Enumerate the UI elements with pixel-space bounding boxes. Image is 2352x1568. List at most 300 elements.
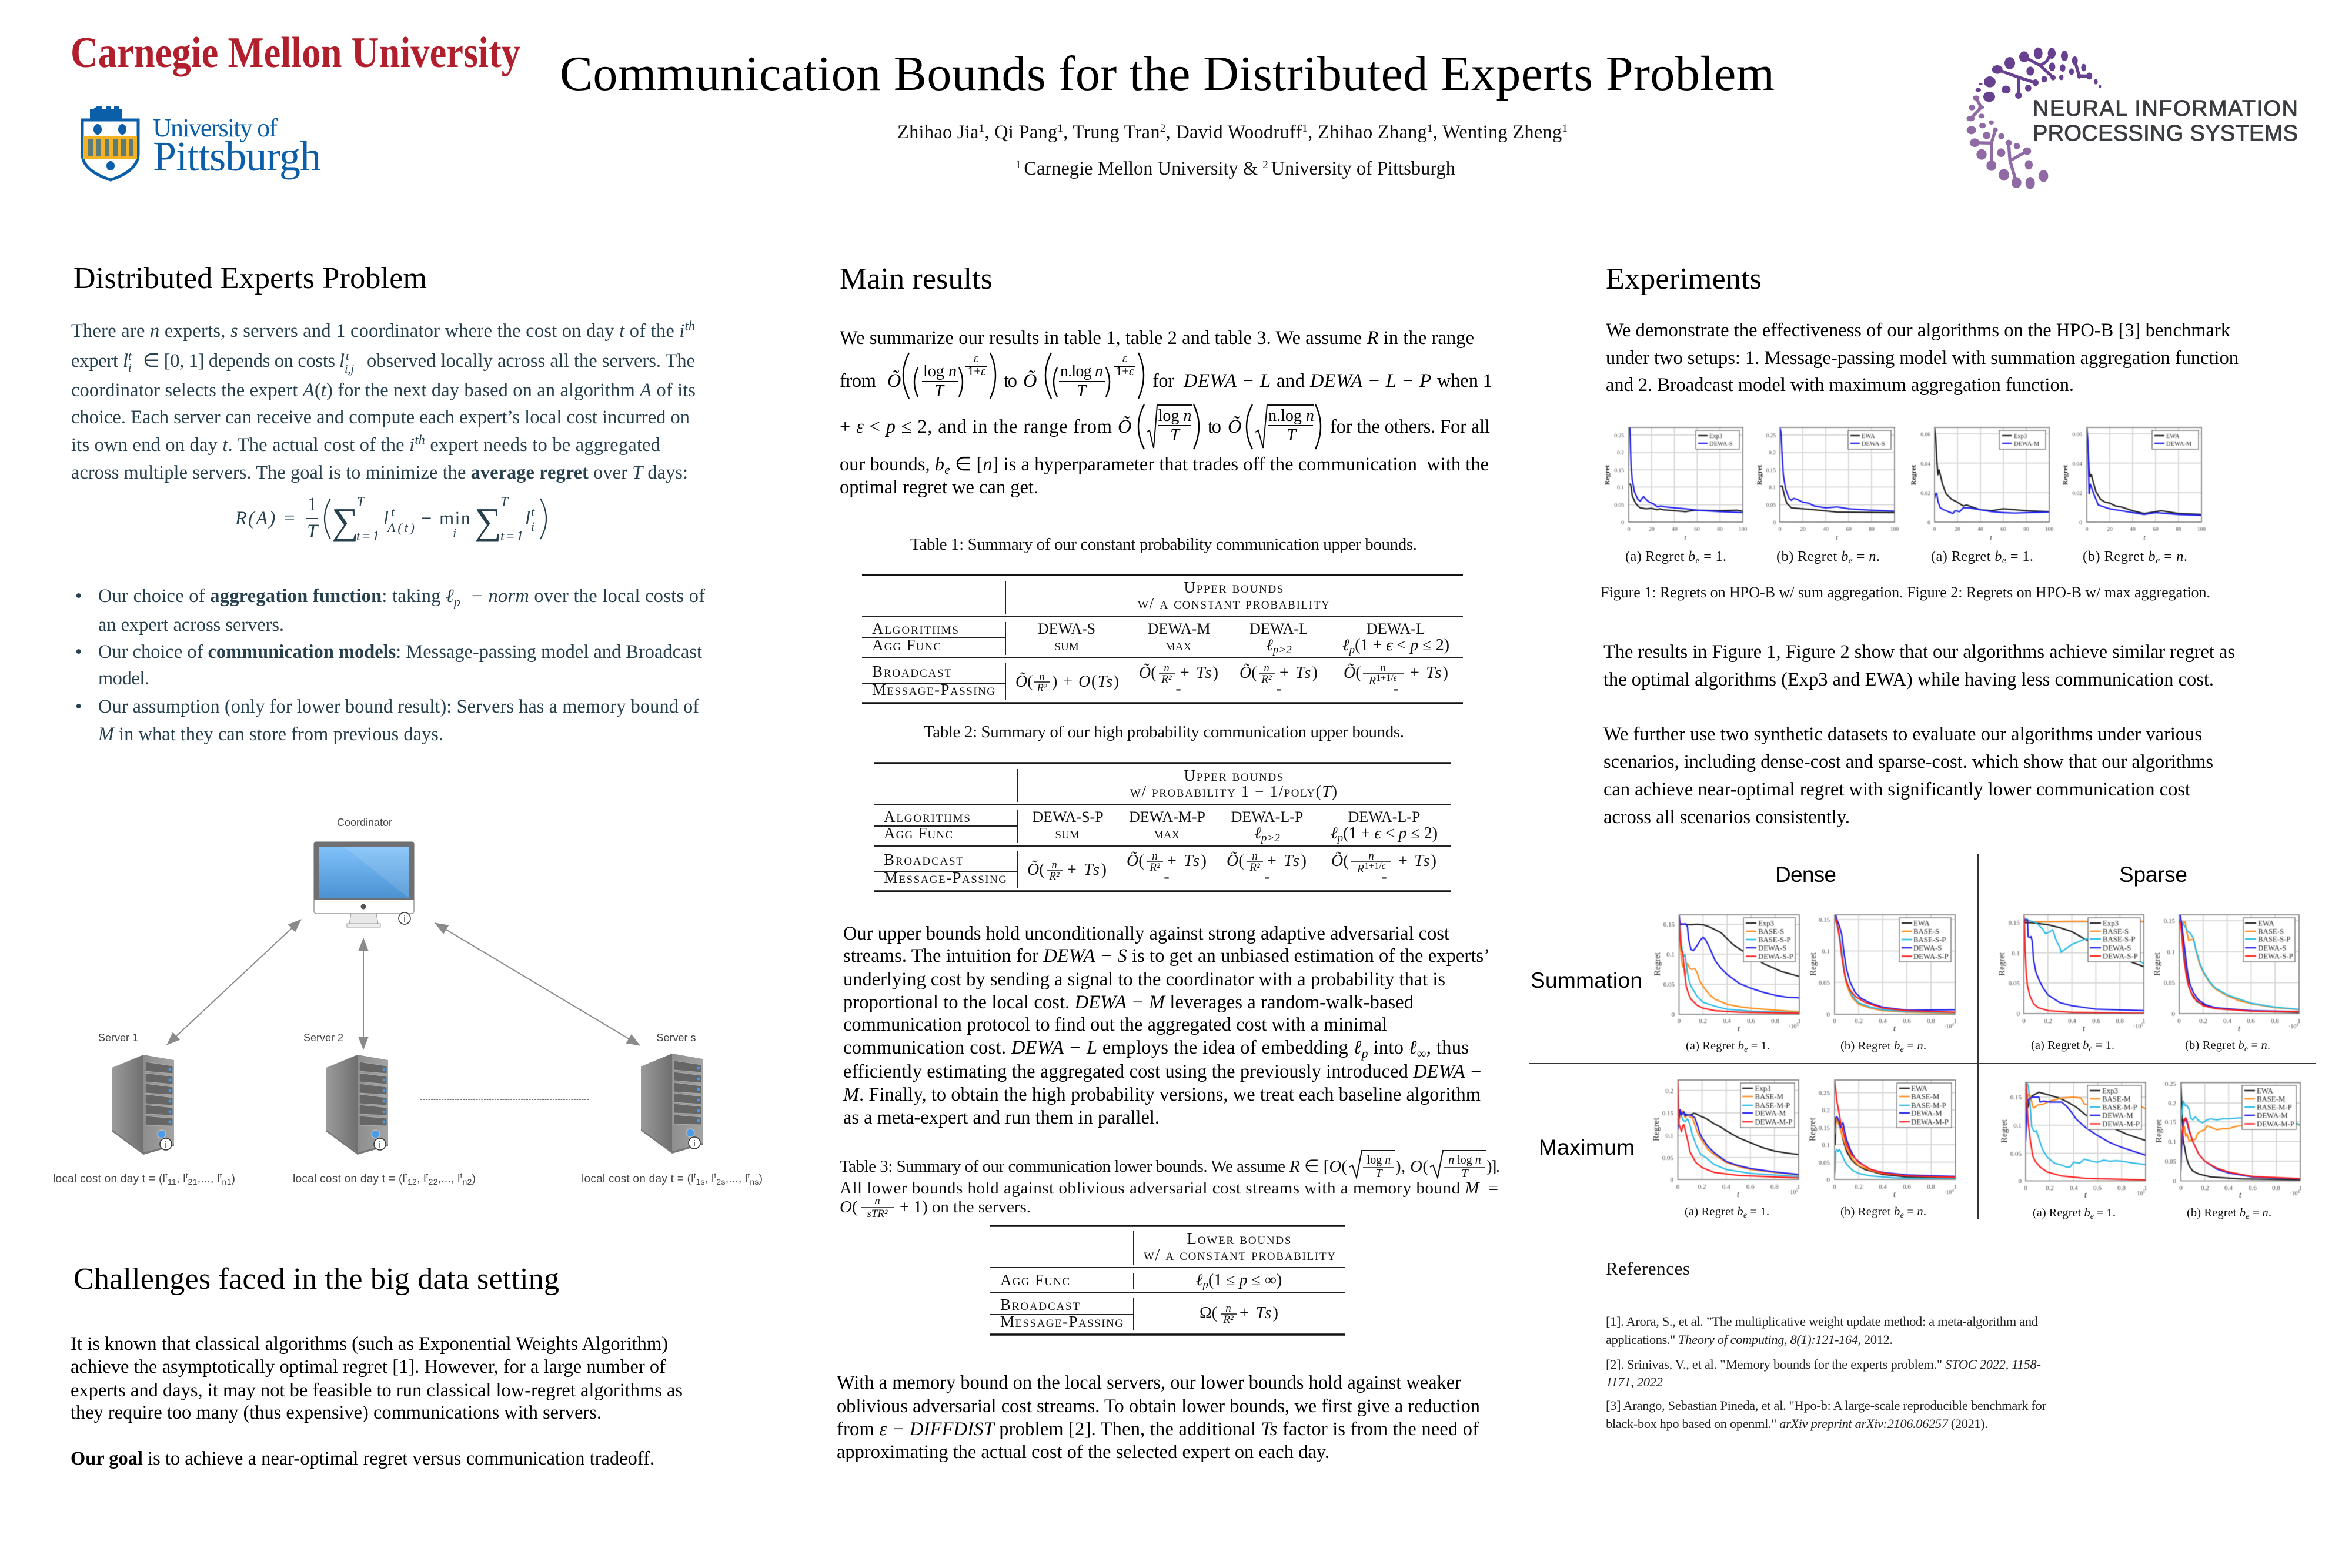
text block: bullet list: • xyxy=(75,696,82,717)
text block: problem description: ∈ [0, 1] depends on costs xyxy=(143,350,335,372)
table 1: constant probability upper bounds: + Ts) xyxy=(1180,664,1218,682)
chart: dense summation a: 0 xyxy=(1671,1011,1675,1018)
table 1: constant probability upper bounds: ) + O(Ts) xyxy=(1052,673,1119,691)
chart: sparse maximum b: t xyxy=(2239,1191,2242,1200)
table 2: high probability upper bounds: Broadcast xyxy=(884,851,963,868)
chart: dense summation b: 0 xyxy=(1826,1011,1830,1018)
chart: dense summation b: ·10 xyxy=(1944,1024,1952,1030)
icon: server 2 xyxy=(326,1055,388,1155)
chart: sparse summation a: 0.1 xyxy=(2012,950,2020,957)
table 3: lower bounds xyxy=(990,1226,1345,1335)
chart: dense summation b: 0.6 xyxy=(1903,1018,1911,1025)
sub-captions: synthetic plots: e xyxy=(1743,1211,1747,1220)
panel: main results xyxy=(837,262,1500,1463)
sub-captions: HPO-B plots: = 1. xyxy=(2006,549,2033,564)
text block: problem description: its own end on day t. The actual cost of the i xyxy=(71,434,415,456)
table 2: high probability upper bounds: Õ( xyxy=(1127,852,1144,870)
table 2: high probability upper bounds: DEWA-S-P xyxy=(1032,808,1104,825)
text block: upper bound intuition: as a meta-expert and run them in parallel. xyxy=(843,1107,1160,1128)
text block: results summary: 1+ε xyxy=(1116,364,1134,378)
text block: upper bound intuition: p xyxy=(1360,1046,1368,1061)
chart: dense summation b: 4 xyxy=(1952,1022,1954,1027)
sub-captions: synthetic plots xyxy=(1685,1039,2271,1221)
table 2: high probability upper bounds: + Ts) xyxy=(1267,852,1307,870)
chart: sparse summation b: 1 xyxy=(2297,1018,2301,1025)
chart: dense maximum a: 1 xyxy=(1797,1183,1800,1191)
authors: , Qi Pang xyxy=(984,122,1057,143)
table 2: high probability upper bounds: 1+1/ xyxy=(1364,861,1382,871)
text block: results summary: when 1 xyxy=(1437,370,1492,392)
caption: table 3: T xyxy=(1375,1167,1383,1180)
text block: problem description xyxy=(71,318,696,483)
chart: sparse summation b: EWA xyxy=(2258,920,2274,928)
chart: figure 1b regret sum aggregation: 40 xyxy=(1823,527,1829,533)
sub-captions: HPO-B plots: (a) Regret b xyxy=(1931,549,2002,564)
table 2: high probability upper bounds: ℓ xyxy=(1331,824,1338,842)
wordmark: University of: University of xyxy=(153,113,278,142)
formula: average regret: − xyxy=(421,508,432,529)
chart: dense summation a: ·10 xyxy=(1789,1024,1796,1030)
sub-captions: synthetic plots: e xyxy=(2246,1212,2249,1221)
text block: synthetic datasets: scenarios, including dense-cost and sparse-cost. which show that our algorithms xyxy=(1603,751,2213,773)
text block: lower bound intuition: from ε − DIFFDIST problem [2]. Then, the additional Ts factor is from the need of xyxy=(837,1419,1479,1440)
text block: upper bound intuition: into xyxy=(1368,1037,1408,1058)
text block: problem description: choice. Each server can receive and compute each expert’s local cost incurred on xyxy=(71,407,690,428)
text block: problem description: t xyxy=(128,350,132,363)
chart: dense maximum b: 0.2 xyxy=(1855,1183,1863,1191)
table 1: constant probability upper bounds: Õ( xyxy=(1240,664,1257,682)
table 1: constant probability upper bounds: sum xyxy=(1054,636,1079,654)
authors: Zhihao Jia xyxy=(897,122,978,143)
chart: figure 1b regret sum aggregation: 0 xyxy=(1773,520,1776,526)
text block: results summary: Õ xyxy=(1228,416,1241,437)
formula: average regret: R(A) = xyxy=(235,508,296,529)
authors: 1 xyxy=(1427,122,1433,135)
chart: sparse maximum a: 1 xyxy=(2144,1185,2147,1192)
text block: results discussion: the optimal algorithms (Exp3 and EWA) while having less communication cost. xyxy=(1603,669,2214,690)
chart: sparse maximum b: 0 xyxy=(2173,1178,2177,1185)
caption: table 3: O( xyxy=(840,1198,858,1216)
chart: sparse maximum b: BASE-M xyxy=(2257,1095,2285,1103)
chart: dense maximum a: 0 xyxy=(1676,1183,1680,1191)
label: local cost server 2: t xyxy=(405,1171,407,1180)
text block: HPO-B intro xyxy=(1606,320,2239,396)
text block: problem description: expert xyxy=(71,350,118,372)
chart: sparse maximum a: 0.6 xyxy=(2093,1185,2102,1192)
chart: figure 1b regret sum aggregation: Regret xyxy=(1755,465,1763,485)
chart: figure 1a regret sum aggregation: 40 xyxy=(1672,527,1678,533)
caption: table 3: sTR² xyxy=(867,1208,888,1220)
text block: results summary: DEWA − L − P xyxy=(1309,370,1431,392)
chart: sparse summation b: 0.8 xyxy=(2271,1018,2279,1025)
chart: sparse summation a xyxy=(1997,915,2146,1034)
table 2: high probability upper bounds: Upper bounds xyxy=(1184,767,1283,784)
chart: sparse summation b: 0.4 xyxy=(2223,1018,2231,1025)
caption: table 3: )]. xyxy=(1486,1157,1500,1176)
chart: dense summation a: BASE-S-P xyxy=(1758,936,1790,944)
label: local cost server s: t xyxy=(714,1171,717,1180)
sub-captions: synthetic plots: = 1. xyxy=(1747,1205,1769,1218)
table 2: high probability upper bounds: ϵ < p ≤ 2) xyxy=(1374,824,1438,842)
text block: results summary: log n xyxy=(923,362,957,380)
chart: figure 1a regret sum aggregation: Exp3 xyxy=(1709,433,1722,440)
label: local cost server s: ns xyxy=(750,1177,759,1186)
chart: figure 2b regret max aggregation: Regret xyxy=(2061,465,2069,485)
chart: sparse maximum a: 0.4 xyxy=(2070,1185,2078,1192)
chart: sparse maximum a xyxy=(2000,1082,2147,1200)
chart: sparse summation b: 0.2 xyxy=(2199,1018,2207,1025)
chart: dense summation b: BASE-S xyxy=(1913,928,1939,936)
table 2: high probability upper bounds: sum xyxy=(1055,824,1080,842)
table 1: constant probability upper bounds: Upper bounds xyxy=(1184,579,1283,596)
chart: sparse maximum b: 0.2 xyxy=(2168,1100,2176,1107)
sub-captions: synthetic plots: = xyxy=(2248,1039,2261,1052)
sub-captions: HPO-B plots: e xyxy=(2002,556,2006,566)
chart: sparse summation b xyxy=(2153,915,2301,1034)
table 3: lower bounds: Lower bounds xyxy=(1187,1230,1291,1248)
table 1: constant probability upper bounds: ℓ xyxy=(1266,636,1273,654)
chart: sparse maximum b: 0.2 xyxy=(2201,1185,2209,1192)
chart: dense maximum a: Exp3 xyxy=(1755,1084,1771,1092)
chart: figure 2b regret max aggregation xyxy=(2061,427,2206,541)
text block: results summary: e xyxy=(944,462,950,477)
sub-captions: synthetic plots: (a) Regret b xyxy=(2031,1039,2089,1052)
label: local cost server 2: 12 xyxy=(407,1177,417,1186)
chart: dense maximum a: 0.05 xyxy=(1662,1155,1673,1162)
chart: sparse maximum a: 0.05 xyxy=(2010,1151,2022,1158)
table 1: constant probability upper bounds: w/ a constant probability xyxy=(1138,594,1329,612)
chart: dense summation a: 0.15 xyxy=(1663,921,1675,928)
table 1: constant probability upper bounds: ϵ xyxy=(1394,673,1398,683)
table 1: constant probability upper bounds: R² xyxy=(1161,673,1172,686)
table 2: high probability upper bounds: Algorithms xyxy=(884,808,970,825)
chart: sparse summation b: 4 xyxy=(2296,1022,2298,1027)
table 2: high probability upper bounds: Õ( xyxy=(1227,852,1244,870)
chart: dense summation a: DEWA-S xyxy=(1758,944,1786,952)
chart: dense summation b: 0.4 xyxy=(1879,1018,1887,1025)
chart: figure 2a regret max aggregation: 0 xyxy=(1927,520,1930,526)
chart: sparse maximum b: BASE-M-P xyxy=(2257,1103,2292,1111)
sub-captions: synthetic plots: (a) Regret b xyxy=(2033,1206,2090,1219)
text block: HPO-B intro: under two setups: 1. Message-passing model with summation aggregation function xyxy=(1606,347,2239,369)
chart: figure 2a regret max aggregation xyxy=(1909,427,2053,541)
table 1: constant probability upper bounds: p xyxy=(1348,644,1355,656)
table 2: high probability upper bounds: (1 + xyxy=(1343,824,1374,842)
authors: , Zhihao Zhang xyxy=(1308,122,1427,143)
chart: sparse maximum b: Regret xyxy=(2154,1119,2164,1143)
text block: results summary: optimal regret we can get. xyxy=(840,477,1038,498)
chart: sparse maximum a: BASE-M-P xyxy=(2102,1103,2137,1111)
chart: dense summation a: 0.1 xyxy=(1666,951,1675,958)
affiliations: Carnegie Mellon University & xyxy=(1024,158,1262,179)
chart: dense summation b: EWA xyxy=(1913,920,1930,928)
text block: upper bound intuition: efficiently estimating the aggregated cost using the previously introduced DEWA − xyxy=(843,1061,1482,1082)
chart: dense summation b: t xyxy=(1893,1024,1896,1034)
table 2: high probability upper bounds: - xyxy=(1264,868,1270,886)
text block: results summary: ε xyxy=(1122,351,1128,365)
table 1: constant probability upper bounds: Agg Func xyxy=(872,636,941,654)
text block: results summary: n.log n xyxy=(1268,407,1314,425)
table 1: constant probability upper bounds: DEWA-M xyxy=(1148,620,1210,637)
label: local cost server 1: t xyxy=(220,1171,222,1180)
text block: challenges body xyxy=(71,1333,683,1423)
chart: figure 1b regret sum aggregation: 100 xyxy=(1890,527,1899,533)
sub-captions: synthetic plots: = xyxy=(1904,1039,1917,1052)
reference 2: 1171, 2022 xyxy=(1606,1375,1663,1389)
text block: problem description: t xyxy=(346,350,349,363)
caption: table 3: Table 3: Summary of our communication lower bounds. We assume xyxy=(840,1157,1285,1176)
table 1: constant probability upper bounds: DEWA-L xyxy=(1367,620,1425,637)
text block: bullet list: over the local costs of xyxy=(534,586,705,607)
text block: lower bound intuition: approximating the actual cost of the selected expert on each day. xyxy=(837,1442,1329,1463)
chart: dense summation b: BASE-S-P xyxy=(1913,936,1946,944)
chart: dense maximum b: 0.05 xyxy=(1819,1159,1830,1166)
chart: dense summation a: BASE-S xyxy=(1758,928,1784,936)
text block: results summary xyxy=(840,327,1492,498)
chart: dense maximum b: 0 xyxy=(1833,1183,1836,1191)
authors: , Trung Tran xyxy=(1063,122,1160,143)
chart: figure 2a regret max aggregation: DEWA-M xyxy=(2014,441,2040,447)
table 1: constant probability upper bounds: DEWA-S xyxy=(1038,620,1095,637)
authors: 2 xyxy=(1160,122,1165,135)
text block: results summary: to xyxy=(1004,370,1017,392)
chart: figure 2b regret max aggregation: 0 xyxy=(2086,527,2089,533)
text block: problem description: expert needs to be aggregated xyxy=(425,434,660,456)
caption: table 2: Table 2: Summary of our high probability communication upper bounds. xyxy=(924,723,1404,741)
table 2: high probability upper bounds: Õ( xyxy=(1027,861,1045,879)
sub-captions: synthetic plots: n. xyxy=(1917,1205,1926,1218)
chart: figure 1a regret sum aggregation: 0 xyxy=(1621,520,1624,526)
text block: results summary: T xyxy=(1077,382,1087,400)
chart: figure 2b regret max aggregation: DEWA-M xyxy=(2166,441,2192,447)
chart: figure 2b regret max aggregation: 0 xyxy=(2079,520,2082,526)
text block: bullet list: − norm xyxy=(460,586,529,607)
caption: table 3 xyxy=(840,1151,1500,1220)
table 2: high probability upper bounds: max xyxy=(1154,824,1180,842)
text block: bullet list: model. xyxy=(98,668,149,689)
reference 2 xyxy=(1606,1357,2041,1389)
table 1: constant probability upper bounds: Message-Passing xyxy=(872,681,995,698)
table 1: constant probability upper bounds: (1 + xyxy=(1355,636,1386,654)
panel: references xyxy=(1606,1258,2046,1431)
text block: challenges body: experts and days, it may not be feasible to run classical low-regret algorithms as xyxy=(71,1380,683,1401)
chart: sparse maximum b: 0 xyxy=(2179,1185,2183,1192)
formula: average regret: l xyxy=(383,508,389,529)
caption: table 3: All lower bounds hold against oblivious adversarial cost streams with a memory bound M = xyxy=(840,1179,1498,1198)
chart: figure 1b regret sum aggregation: 0.15 xyxy=(1766,468,1776,474)
table 1: constant probability upper bounds: DEWA-L xyxy=(1250,620,1308,637)
table 1: constant probability upper bounds: p>2 xyxy=(1272,644,1292,656)
chart: dense summation a: 0.2 xyxy=(1699,1018,1707,1025)
label: local cost server 2: 22 xyxy=(429,1177,438,1186)
table 3: lower bounds: Broadcast xyxy=(1000,1296,1080,1313)
chart: dense summation b: 0.2 xyxy=(1855,1018,1863,1025)
chart: dense maximum b: 0.1 xyxy=(1822,1142,1830,1149)
icon: server s: i xyxy=(693,1139,696,1149)
chart: figure 1a regret sum aggregation: 0 xyxy=(1628,527,1631,533)
text block: results summary: ε xyxy=(974,351,979,365)
table 1: constant probability upper bounds: max xyxy=(1165,636,1191,654)
text block: challenges body: they require too many (thus expensive) communications with servers. xyxy=(71,1402,602,1423)
chart: dense maximum b: 0.15 xyxy=(1819,1125,1830,1132)
heading: Experiments xyxy=(1606,262,1762,296)
wordmark: Pittsburgh: Pittsburgh xyxy=(153,133,321,180)
table 2: high probability upper bounds: Õ( xyxy=(1331,852,1349,870)
chart: dense summation a: 0 xyxy=(1678,1018,1681,1025)
text block: upper bound intuition: underlying cost by sending a signal to the coordinator with a probability that is xyxy=(843,969,1445,990)
chart: dense maximum b: 0.4 xyxy=(1879,1183,1887,1191)
text block: results summary: T xyxy=(1170,426,1181,444)
text block: results summary: for the others. For all xyxy=(1330,416,1490,437)
sub-captions: synthetic plots: = 1. xyxy=(2093,1039,2114,1052)
text block: results summary: to xyxy=(1208,416,1221,437)
affiliations: 1 xyxy=(1015,159,1024,171)
table 3: lower bounds: Agg Func xyxy=(1000,1271,1070,1289)
text block: problem description: There are n experts, s servers and 1 coordinator where the cost on day t of the i xyxy=(71,320,684,342)
chart: dense summation b: 0.05 xyxy=(1819,979,1830,987)
formula: average regret: T xyxy=(500,494,509,509)
affiliations: University of Pittsburgh xyxy=(1271,158,1455,179)
reference 3: [3] Arango, Sebastian Pineda, et al. "Hpo-b: A large-scale reproducible benchmark for xyxy=(1606,1398,2046,1413)
table 3: lower bounds: Ω( xyxy=(1200,1304,1217,1322)
text block: problem description: i,j xyxy=(345,363,355,376)
chart: sparse summation a: 0.6 xyxy=(2092,1018,2100,1025)
label: local cost server s: 2s xyxy=(716,1177,725,1186)
table 1: constant probability upper bounds: Broadcast xyxy=(872,663,951,680)
text block: results summary: n] is a hyperparameter that trades off the communication with the xyxy=(983,454,1489,475)
reference 2: [2]. Srinivas, V., et al. ”Memory bounds for the experts problem." STOC 2022, 1158- xyxy=(1606,1357,2041,1372)
authors: 1 xyxy=(1302,122,1308,135)
chart: figure 2b regret max aggregation: 20 xyxy=(2107,527,2113,533)
text block: problem description: th xyxy=(685,318,695,333)
chart: dense maximum a: Regret xyxy=(1652,1117,1661,1141)
table 2: high probability upper bounds: Agg Func xyxy=(884,824,953,842)
icon: purple dot spiral xyxy=(1966,47,2102,189)
chart: figure 1b regret sum aggregation: 80 xyxy=(1869,527,1875,533)
chart: sparse summation b: 0.05 xyxy=(2164,979,2176,987)
chart: dense maximum b: ·10 xyxy=(1944,1189,1952,1196)
chart: sparse maximum b: ·10 xyxy=(2290,1191,2297,1197)
chart: figure 1b regret sum aggregation: 0.2 xyxy=(1769,450,1776,456)
table 1: constant probability upper bounds: - xyxy=(1175,680,1181,698)
authors: 1 xyxy=(1057,122,1063,135)
chart: figure 1b regret sum aggregation: t xyxy=(1836,533,1838,541)
table 1: constant probability upper bounds: ℓ xyxy=(1342,636,1349,654)
sub-captions: synthetic plots: e xyxy=(2090,1212,2094,1221)
text block: results summary: T xyxy=(934,382,945,400)
authors: , Wenting Zheng xyxy=(1433,122,1562,143)
chart: dense maximum b: BASE-M-P xyxy=(1911,1102,1946,1110)
text block: results summary: from xyxy=(840,370,876,392)
sub-captions: HPO-B plots: n. xyxy=(2176,549,2187,564)
chart: dense summation b xyxy=(1809,915,1957,1034)
caption: table 3: T xyxy=(1461,1167,1469,1180)
sub-captions: synthetic plots: (b) Regret b xyxy=(2187,1206,2246,1219)
authors: , David Woodruff xyxy=(1166,122,1302,143)
chart: sparse maximum b: 1 xyxy=(2298,1185,2302,1192)
formula: average regret: i xyxy=(453,526,456,540)
chart: sparse maximum b: EWA xyxy=(2257,1086,2273,1095)
text block: problem description: l xyxy=(123,350,128,372)
text block: upper bound intuition: Our upper bounds hold unconditionally against strong adaptive adversarial cost xyxy=(843,923,1449,944)
table 2: high probability upper bounds: n xyxy=(1368,850,1374,862)
chart: sparse summation a: 0 xyxy=(2022,1018,2026,1025)
reference 3: black-box hpo based on openml." arXiv preprint arXiv:2106.06257 (2021). xyxy=(1606,1416,1988,1431)
table 1: constant probability upper bounds: n xyxy=(1380,662,1386,674)
sub-captions: synthetic plots: = xyxy=(2249,1206,2262,1219)
formula: average regret: l xyxy=(525,508,530,529)
text block: results summary: for xyxy=(1152,370,1174,392)
chart: sparse summation b: Regret xyxy=(2153,952,2162,976)
label: server 1: Server 1 xyxy=(98,1032,138,1044)
text block: problem description: across multiple servers. The goal is to minimize the average regret over T days: xyxy=(71,462,688,483)
chart: sparse maximum a: 0 xyxy=(2024,1185,2027,1192)
sub-captions: synthetic plots: (b) Regret b xyxy=(1840,1039,1900,1052)
table 1: constant probability upper bounds: - xyxy=(1393,680,1399,698)
table 1: constant probability upper bounds: 1+1/ xyxy=(1376,673,1394,683)
chart: figure 1b regret sum aggregation xyxy=(1755,427,1899,541)
heading: Challenges faced in the big data setting xyxy=(74,1262,559,1296)
chart: dense summation a: 5 xyxy=(1796,1022,1799,1027)
chart: figure 1b regret sum aggregation: 0.05 xyxy=(1766,503,1776,509)
logo: University of Pittsburgh xyxy=(82,106,321,180)
text block: problem description: i xyxy=(128,362,132,375)
sub-captions: synthetic plots: e xyxy=(2244,1045,2248,1054)
chart: figure 2b regret max aggregation: EWA xyxy=(2166,433,2180,440)
chart: sparse maximum a: Exp3 xyxy=(2102,1086,2118,1095)
panel: experiments xyxy=(1529,262,2316,1431)
formula: average regret: t=1 xyxy=(500,529,523,543)
chart: figure 1a regret sum aggregation: 0.25 xyxy=(1614,433,1624,439)
sub-captions: HPO-B plots: n. xyxy=(1869,549,1880,564)
label: local cost server 2: , l xyxy=(417,1173,426,1185)
chart: sparse maximum a: 0.1 xyxy=(2013,1122,2022,1129)
label: local cost server 1: t xyxy=(165,1171,168,1180)
chart: figure 2a regret max aggregation: Regret xyxy=(1909,465,1917,485)
sub-captions: synthetic plots: = xyxy=(1904,1205,1917,1218)
chart: sparse maximum b: 0.6 xyxy=(2249,1185,2257,1192)
text block: upper bound intuition: communication protocol to find out the aggregated cost with a minimal xyxy=(843,1014,1387,1035)
label: local cost server s: ) xyxy=(759,1173,763,1185)
text block: results summary: n.log n xyxy=(1060,362,1103,380)
formula: average regret: i xyxy=(531,519,534,534)
table 1: constant probability upper bounds: Algorithms xyxy=(872,620,958,637)
chart: sparse summation a: t xyxy=(2083,1024,2086,1034)
chart: figure 2b regret max aggregation: 0.02 xyxy=(2072,491,2082,497)
chart: sparse maximum a: 0 xyxy=(2018,1178,2022,1185)
chart: sparse maximum b: DEWA-M-P xyxy=(2257,1120,2294,1128)
chart: sparse summation a: BASE-S xyxy=(2103,928,2129,936)
label: local cost server s: local cost on day t = (l xyxy=(582,1173,693,1185)
text block: synthetic datasets xyxy=(1603,724,2213,828)
authors xyxy=(897,122,1568,143)
chart: dense maximum a: DEWA-M-P xyxy=(1755,1118,1792,1126)
chart: dense summation a: DEWA-S-P xyxy=(1758,952,1793,961)
chart: sparse summation b: 0.1 xyxy=(2167,949,2175,956)
chart: sparse maximum b: 0.25 xyxy=(2165,1081,2177,1088)
chart: sparse maximum b: DEWA-M xyxy=(2257,1111,2288,1119)
chart: dense summation b: DEWA-S xyxy=(1913,944,1942,952)
chart: sparse maximum a: ·10 xyxy=(2135,1191,2143,1197)
caption: table 3: log n xyxy=(1367,1154,1391,1166)
table 3: lower bounds: ℓ xyxy=(1196,1271,1203,1289)
table 1: constant probability upper bounds: Õ( xyxy=(1139,664,1157,682)
table 2: high probability upper bounds: ℓ xyxy=(1254,824,1261,842)
table 2: high probability upper bounds: DEWA-M-P xyxy=(1129,808,1205,825)
chart: sparse maximum b: 0.15 xyxy=(2165,1119,2177,1126)
chart: dense maximum b: 0.25 xyxy=(1819,1090,1830,1097)
chart: sparse summation a: 0.8 xyxy=(2116,1018,2124,1025)
